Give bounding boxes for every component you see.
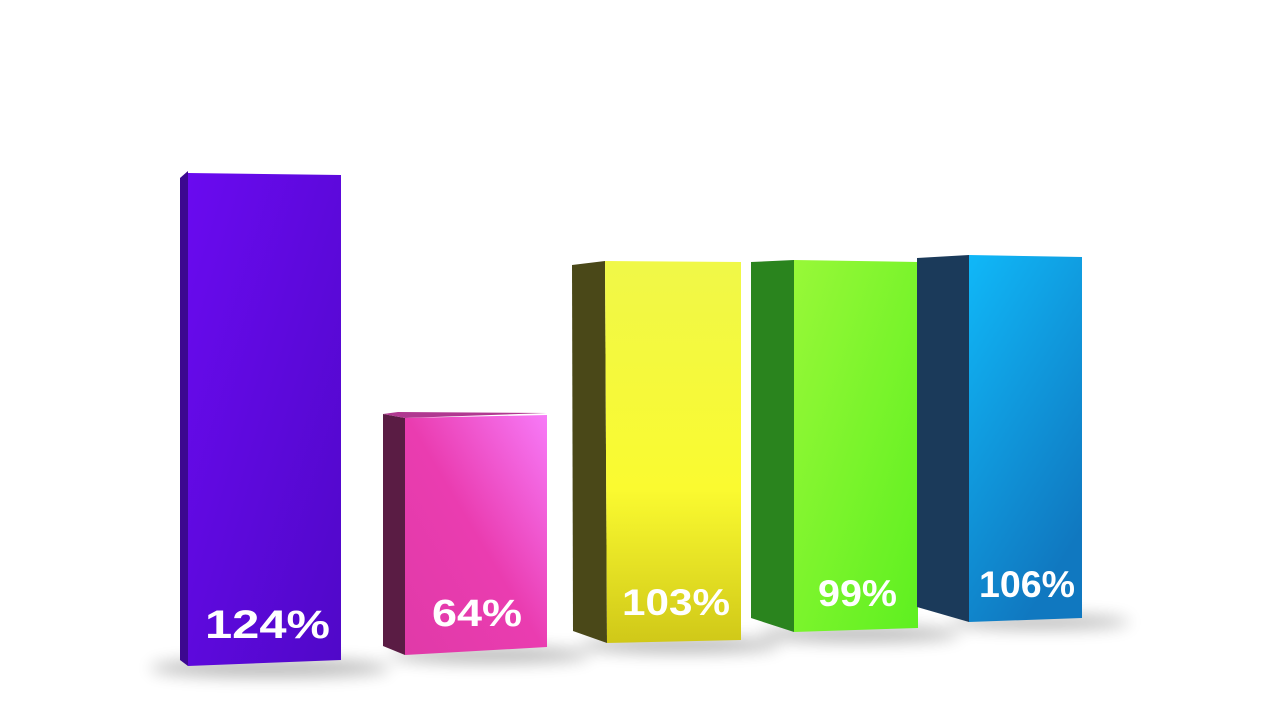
shadow: floor xyxy=(150,615,1130,677)
bar: 103% xyxy=(572,261,741,643)
bar: 99% xyxy=(751,260,918,632)
bar: 64% xyxy=(383,412,547,655)
bar: 103%: 103% xyxy=(622,582,730,623)
bar: 124% xyxy=(180,171,341,666)
bar: 99%: 99% xyxy=(818,573,897,614)
bar: 124%: 124% xyxy=(205,603,330,647)
bar: 64%: 64% xyxy=(432,593,522,635)
bar: 106%: 106% xyxy=(979,564,1075,605)
bar: 106% xyxy=(917,255,1082,622)
